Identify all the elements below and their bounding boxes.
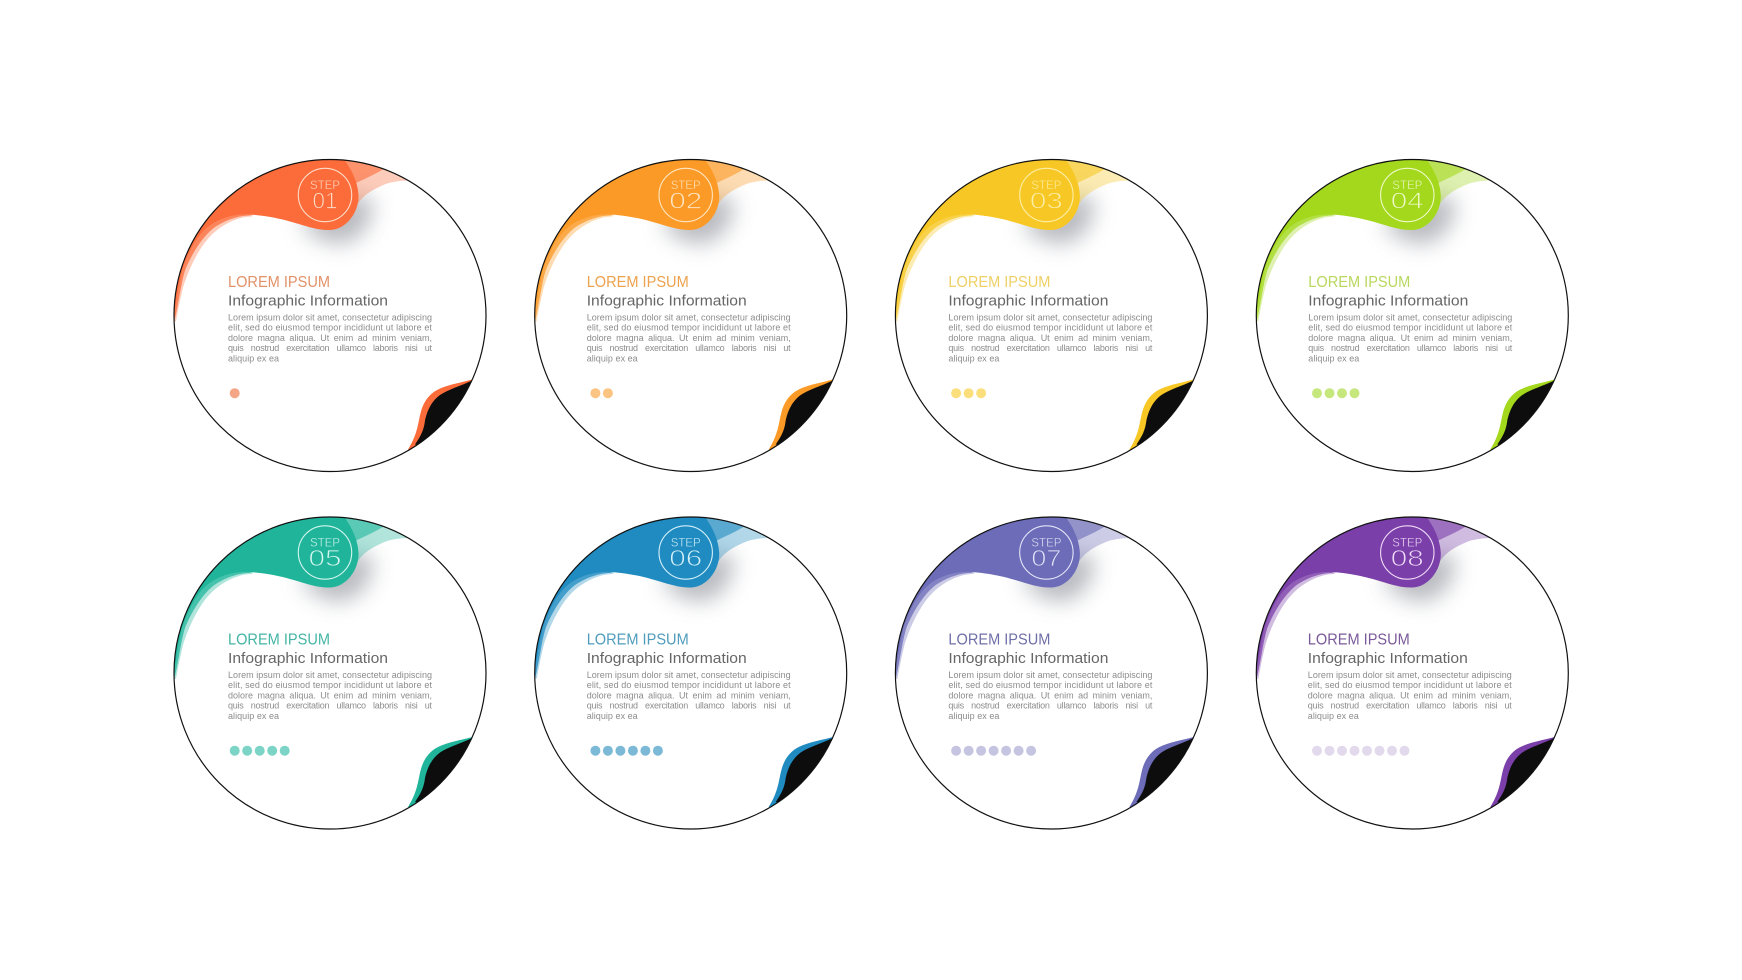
top ribbon <box>160 156 410 322</box>
body text: elit, sed do eiusmod tempor incididunt ut labore et <box>228 680 432 690</box>
step badge <box>1020 526 1073 579</box>
subheading: Infographic Information <box>1308 650 1468 667</box>
progress dots <box>590 388 613 398</box>
body text: Lorem ipsum dolor sit amet, consectetur adipiscing <box>948 312 1152 322</box>
heading: LOREM IPSUM <box>587 632 689 648</box>
body text: dolore magna aliqua. Ut enim ad minim veniam, <box>948 690 1152 700</box>
body text: Lorem ipsum dolor sit amet, consectetur adipiscing <box>587 312 791 322</box>
step badge: 02 <box>669 188 702 214</box>
panel: step 6 <box>521 513 856 829</box>
subheading: Infographic Information <box>948 293 1108 310</box>
body text <box>948 670 1153 721</box>
body text: dolore magna aliqua. Ut enim ad minim veniam, <box>1308 333 1512 343</box>
body text: quis nostrud exercitation ullamco laboris nisi ut <box>587 701 791 711</box>
subheading: Infographic Information <box>587 650 747 667</box>
subheading: Infographic Information <box>228 650 388 667</box>
page curl <box>408 380 472 450</box>
step badge: 03 <box>1030 188 1063 214</box>
heading: LOREM IPSUM <box>228 274 330 291</box>
page curl <box>408 737 472 807</box>
circle outline <box>895 517 1207 829</box>
circle outline <box>174 160 486 472</box>
body text: quis nostrud exercitation ullamco laboris nisi ut <box>948 701 1153 711</box>
top ribbon <box>521 513 771 679</box>
panel: step 3 <box>881 156 1216 472</box>
circle outline <box>535 160 847 472</box>
step badge <box>298 168 352 222</box>
body text <box>228 312 432 363</box>
body text: aliquip ex ea <box>587 711 638 721</box>
page curl <box>1490 380 1554 450</box>
subheading: Infographic Information <box>948 650 1108 667</box>
step badge: 07 <box>1031 545 1061 571</box>
page curl <box>1130 380 1193 450</box>
step badge: 06 <box>669 545 702 571</box>
body text: aliquip ex ea <box>228 353 279 363</box>
body text: elit, sed do eiusmod tempor incididunt ut labore et <box>587 680 791 690</box>
body text: Lorem ipsum dolor sit amet, consectetur adipiscing <box>1308 670 1512 680</box>
body text: dolore magna aliqua. Ut enim ad minim veniam, <box>1308 690 1512 700</box>
body text: dolore magna aliqua. Ut enim ad minim veniam, <box>587 333 791 343</box>
body text: elit, sed do eiusmod tempor incididunt ut labore et <box>948 323 1153 333</box>
page curl <box>768 737 832 807</box>
body text <box>587 670 791 721</box>
body text: Lorem ipsum dolor sit amet, consectetur adipiscing <box>1308 312 1512 322</box>
page curl <box>1490 737 1554 807</box>
step badge: 01 <box>312 188 338 214</box>
top ribbon <box>1242 156 1492 322</box>
progress dots <box>951 388 986 398</box>
progress dots <box>1312 746 1410 756</box>
heading: LOREM IPSUM <box>1308 632 1410 648</box>
progress dots <box>230 746 290 756</box>
body text <box>1308 312 1513 363</box>
body text: aliquip ex ea <box>948 711 999 721</box>
body text: elit, sed do eiusmod tempor incididunt ut labore et <box>1308 680 1512 690</box>
circle outline <box>1256 517 1568 829</box>
body text: Lorem ipsum dolor sit amet, consectetur adipiscing <box>228 312 432 322</box>
body text: quis nostrud exercitation ullamco laboris nisi ut <box>1308 701 1512 711</box>
body text: dolore magna aliqua. Ut enim ad minim veniam, <box>587 690 791 700</box>
step badge: 08 <box>1391 545 1424 571</box>
heading: LOREM IPSUM <box>948 632 1050 648</box>
circle outline <box>895 160 1207 472</box>
heading: LOREM IPSUM <box>948 274 1050 291</box>
body text: elit, sed do eiusmod tempor incididunt ut labore et <box>587 323 791 333</box>
body text: aliquip ex ea <box>948 353 999 363</box>
panel: step 2 <box>521 156 856 472</box>
body text: aliquip ex ea <box>1308 711 1359 721</box>
body text: quis nostrud exercitation ullamco laboris nisi ut <box>228 343 432 353</box>
panel: step 4 <box>1242 156 1577 472</box>
body text: quis nostrud exercitation ullamco laboris nisi ut <box>1308 343 1513 353</box>
step badge <box>659 168 712 222</box>
top ribbon <box>881 156 1131 322</box>
subheading: Infographic Information <box>228 293 388 310</box>
body text <box>228 670 432 721</box>
body text: elit, sed do eiusmod tempor incididunt ut labore et <box>228 323 432 333</box>
body text <box>948 312 1153 363</box>
top ribbon <box>1242 513 1492 679</box>
step badge: STEP <box>1392 180 1423 192</box>
circle outline <box>535 517 847 829</box>
body text: Lorem ipsum dolor sit amet, consectetur adipiscing <box>948 670 1152 680</box>
panel: step 7 <box>881 513 1216 829</box>
body text: elit, sed do eiusmod tempor incididunt ut labore et <box>948 680 1153 690</box>
top ribbon <box>881 513 1131 679</box>
progress dots <box>1312 388 1360 398</box>
body text <box>587 312 791 363</box>
subheading: Infographic Information <box>1308 293 1468 310</box>
panel: step 1 <box>160 156 495 472</box>
heading: LOREM IPSUM <box>587 274 689 291</box>
body text: quis nostrud exercitation ullamco laboris nisi ut <box>587 343 791 353</box>
top ribbon <box>521 156 771 322</box>
progress dots <box>230 388 240 398</box>
circle outline <box>1256 160 1568 472</box>
step badge <box>298 526 352 579</box>
heading: LOREM IPSUM <box>1308 274 1410 291</box>
progress dots <box>590 746 663 756</box>
body text: aliquip ex ea <box>228 711 279 721</box>
step badge: 04 <box>1391 188 1424 214</box>
body text: quis nostrud exercitation ullamco laboris nisi ut <box>948 343 1153 353</box>
body text <box>1308 670 1512 721</box>
progress dots <box>951 746 1036 756</box>
step badge: STEP <box>1031 180 1062 192</box>
step badge <box>1381 168 1434 222</box>
step badge <box>1381 526 1434 579</box>
page curl <box>1130 737 1193 807</box>
panel: step 8 <box>1242 513 1577 829</box>
page curl <box>768 380 832 450</box>
body text: Lorem ipsum dolor sit amet, consectetur adipiscing <box>587 670 791 680</box>
subheading: Infographic Information <box>587 293 747 310</box>
body text: aliquip ex ea <box>1308 353 1359 363</box>
circle outline <box>174 517 486 829</box>
step badge: STEP <box>1392 538 1423 550</box>
step badge: STEP <box>671 180 701 192</box>
body text: aliquip ex ea <box>587 353 638 363</box>
step badge <box>1020 168 1073 222</box>
step badge: 05 <box>308 545 342 571</box>
body text: dolore magna aliqua. Ut enim ad minim veniam, <box>228 690 432 700</box>
body text: quis nostrud exercitation ullamco laboris nisi ut <box>228 701 432 711</box>
top ribbon <box>160 513 410 679</box>
body text: Lorem ipsum dolor sit amet, consectetur adipiscing <box>228 670 432 680</box>
heading: LOREM IPSUM <box>228 632 330 648</box>
step badge: STEP <box>1031 538 1062 550</box>
body text: dolore magna aliqua. Ut enim ad minim veniam, <box>228 333 432 343</box>
step badge: STEP <box>310 538 340 550</box>
body text: dolore magna aliqua. Ut enim ad minim veniam, <box>948 333 1152 343</box>
step badge: STEP <box>671 538 701 550</box>
step badge: STEP <box>310 180 340 192</box>
body text: elit, sed do eiusmod tempor incididunt ut labore et <box>1308 323 1513 333</box>
panel: step 5 <box>160 513 495 829</box>
step badge <box>659 526 712 579</box>
